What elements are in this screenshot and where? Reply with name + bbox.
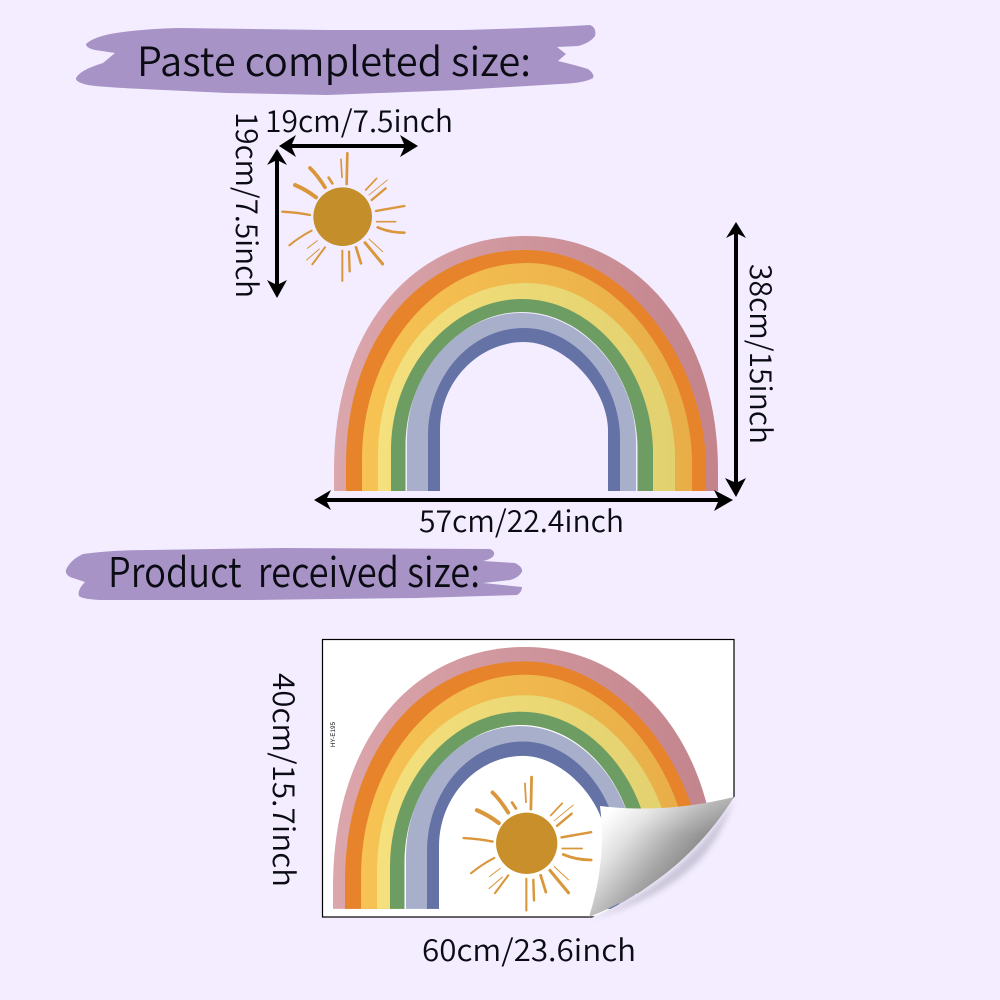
sun rays (464, 777, 591, 911)
heading text: Paste completed size: (137, 30, 531, 88)
rainbow: completed (334, 236, 718, 492)
brush stroke (66, 548, 522, 600)
peeled corner (589, 796, 736, 919)
width label: 60cm/23.6inch (422, 926, 636, 970)
height label: 40cm/15.7inch (264, 673, 308, 887)
heading banner: paste completed size (76, 25, 595, 95)
arrow: rainbow height (725, 222, 746, 497)
product sheet (264, 640, 736, 970)
height label: 19cm/7.5inch (227, 112, 271, 298)
sun sticker with dimensions (227, 97, 453, 298)
sun disc (313, 187, 372, 246)
heading banner: product received size (66, 539, 522, 600)
brush stroke (76, 25, 595, 95)
sun rays (282, 153, 404, 281)
rainbow: on sheet (333, 647, 717, 910)
heading text: Product received size: (108, 539, 480, 599)
height label: 38cm/15inch (741, 264, 785, 444)
sheet background (322, 640, 734, 917)
icon: sun (282, 153, 404, 281)
sun disc (496, 813, 557, 874)
product code: HY-E195 (331, 721, 337, 747)
width label: 19cm/7.5inch (265, 97, 453, 141)
width label: 57cm/22.4inch (419, 497, 624, 541)
icon: sun on sheet (464, 777, 591, 911)
arrow: rainbow width (314, 490, 733, 511)
rainbow sticker with dimensions (314, 222, 785, 541)
arrow: sun width (279, 135, 418, 157)
arrow: sun height (267, 149, 287, 298)
